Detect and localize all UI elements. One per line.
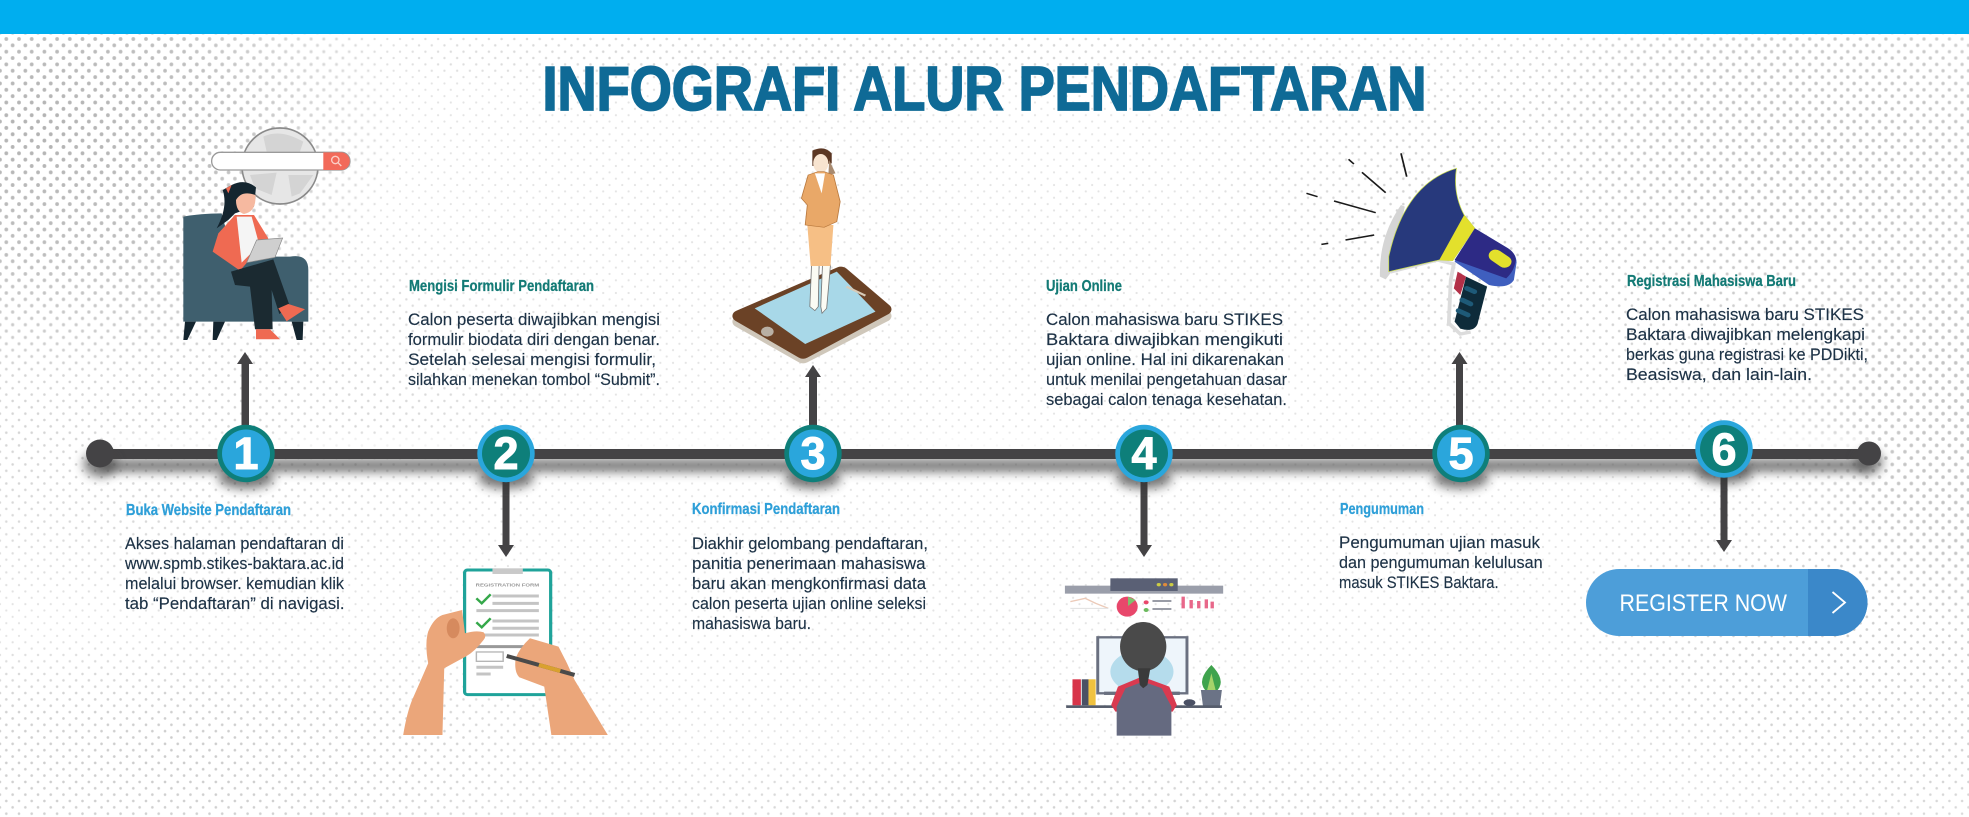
illustration: hands filling registration form: REGISTRATION FORM [476, 583, 539, 589]
heading 3: Konfirmasi Pendaftaran [692, 501, 840, 518]
arrow 6 [1716, 475, 1732, 552]
illustration: hands filling registration form [403, 568, 608, 735]
description 3: mahasiswa baru. [692, 615, 811, 633]
heading 4: Ujian Online [1046, 278, 1122, 295]
arrow 2 [498, 480, 514, 557]
number badge 6: 6 [1711, 424, 1737, 475]
description 4: sebagai calon tenaga kesehatan. [1046, 391, 1287, 409]
description 4: ujian online. Hal ini dikarenakan [1046, 351, 1284, 369]
description 4: Calon mahasiswa baru STIKES [1046, 311, 1283, 329]
description 2: Calon peserta diwajibkan mengisi [408, 311, 660, 329]
top blue band [0, 0, 1969, 34]
description 3: Diakhir gelombang pendaftaran, [692, 535, 928, 553]
description 6: Beasiswa, dan lain-lain. [1626, 366, 1812, 384]
description 5: dan pengumuman kelulusan [1339, 554, 1543, 572]
description 5: Pengumuman ujian masuk [1339, 534, 1541, 552]
description 1: melalui browser. kemudian klik [125, 575, 345, 593]
heading 1: Buka Website Pendaftaran [126, 502, 291, 519]
description 4: Baktara diwajibkan mengikuti [1046, 331, 1283, 349]
description 2 [408, 311, 660, 389]
step 6: new student registration [1586, 273, 1868, 636]
illustration: person at computer with dashboards [1065, 578, 1223, 736]
description 3: calon peserta ujian online seleksi [692, 595, 926, 613]
description 5 [1339, 534, 1543, 592]
arrow 1 [237, 352, 253, 430]
description 1: tab “Pendaftaran” di navigasi. [125, 595, 345, 613]
description 6: berkas guna registrasi ke PDDikti, [1626, 346, 1868, 364]
number badge 3 [784, 425, 842, 489]
description 4: untuk menilai pengetahuan dasar [1046, 371, 1287, 389]
number badge 6 [1695, 420, 1753, 484]
step 2: fill in form [403, 278, 660, 735]
heading 5: Pengumuman [1340, 501, 1424, 518]
number badge 4 [1115, 425, 1173, 489]
description 2: Setelah selesai mengisi formulir, [408, 351, 656, 369]
arrow 3 [805, 365, 821, 430]
number badge 1 [217, 425, 275, 489]
illustration: woman standing on smartphone [740, 148, 884, 357]
description 3 [692, 535, 928, 633]
step 3: confirmation [692, 148, 928, 633]
step 4: online exam [1046, 278, 1287, 736]
arrow 4 [1136, 480, 1152, 557]
illustration: megaphone [1306, 153, 1517, 334]
description 6: Calon mahasiswa baru STIKES [1626, 306, 1864, 324]
title: INFOGRAFI ALUR PENDAFTARAN [542, 55, 1426, 124]
number badge 4: 4 [1131, 428, 1157, 479]
number badge 3: 3 [800, 428, 826, 479]
number badge 5 [1432, 425, 1490, 489]
illustration: woman with laptop and search bar [183, 128, 350, 340]
description 6: Baktara diwajibkan melengkapi [1626, 326, 1865, 344]
number badge 2: 2 [493, 428, 519, 479]
description 1: www.spmb.stikes-baktara.ac.id [124, 555, 344, 573]
step 5: announcement [1306, 153, 1543, 592]
description 5: masuk STIKES Baktara. [1339, 574, 1499, 592]
arrow 5 [1452, 352, 1468, 430]
number badge 5: 5 [1448, 428, 1474, 479]
heading 2: Mengisi Formulir Pendaftaran [409, 278, 594, 295]
timeline line [83, 437, 1883, 477]
step 1: open website [124, 128, 350, 613]
register now button: REGISTER NOW [1620, 590, 1787, 617]
description 1: Akses halaman pendaftaran di [125, 535, 344, 553]
description 3: panitia penerimaan mahasiswa [692, 555, 926, 573]
number badge 2 [477, 425, 535, 489]
register now button [1586, 569, 1868, 636]
description 2: silahkan menekan tombol “Submit”. [408, 371, 660, 389]
description 3: baru akan mengkonfirmasi data [692, 575, 927, 593]
description 4 [1046, 311, 1287, 409]
number badge 1: 1 [233, 428, 259, 479]
description 6 [1626, 306, 1868, 384]
description 1 [124, 535, 345, 613]
description 2: formulir biodata diri dengan benar. [408, 331, 660, 349]
heading 6: Registrasi Mahasiswa Baru [1627, 273, 1796, 290]
